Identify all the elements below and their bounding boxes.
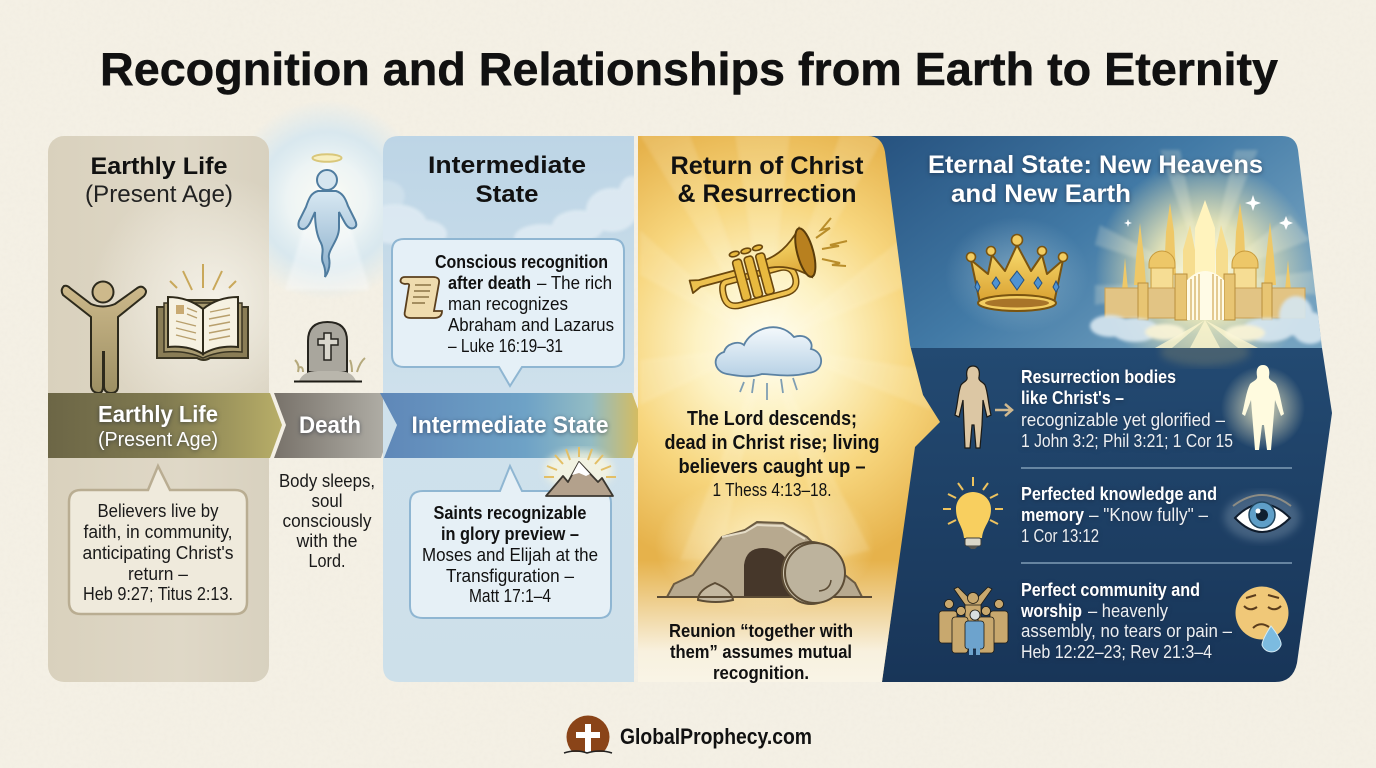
text: the lord descends — [664, 408, 880, 500]
heading: return of christ: Return of Christ — [670, 152, 864, 180]
text: the lord descends: believers caught up – — [678, 456, 866, 478]
timeline band: death — [274, 393, 392, 458]
heading: intermediate state — [428, 152, 586, 208]
text: perfect community: assembly, no tears or pain – — [1021, 621, 1232, 641]
band label: earthly life: (Present Age) — [98, 429, 218, 451]
clouds: city base — [1090, 296, 1328, 344]
callout: saints recognizable: Saints recognizable — [434, 503, 586, 523]
text: perfect community: – heavenly — [1088, 601, 1168, 621]
heading: eternal state — [928, 151, 1263, 208]
icon: light bulb — [943, 477, 1003, 549]
text: perfect community: worship — [1020, 601, 1082, 621]
text: perfected knowledge: memory — [1021, 505, 1084, 525]
callout: saints recognizable — [410, 466, 611, 618]
callout: conscious recognition: after death — [448, 273, 531, 293]
callout: saints recognizable: Matt 17:1–4 — [469, 586, 551, 606]
sparkles — [1124, 195, 1293, 230]
callout: conscious recognition: – The rich — [537, 273, 612, 293]
callout: believers: return – — [128, 564, 188, 584]
icon: mountain with sunburst — [544, 447, 616, 496]
text: the lord descends: 1 Thess 4:13–18. — [712, 480, 832, 500]
text: resurrection bodies: like Christ's – — [1021, 388, 1124, 408]
heading: intermediate state: Intermediate — [428, 152, 586, 179]
callout: believers: Heb 9:27; Titus 2:13. — [83, 584, 233, 604]
icon: tombstone — [294, 322, 365, 382]
text: perfected knowledge — [1021, 484, 1217, 546]
illustration: heavenly city — [1094, 148, 1316, 348]
callout: conscious recognition: man recognizes — [448, 294, 568, 314]
clouds — [383, 176, 634, 244]
icon: natural body to glorified body — [955, 365, 1305, 450]
heading: intermediate state: State — [476, 181, 538, 208]
callout: saints recognizable: in glory preview – — [441, 524, 579, 544]
text: resurrection bodies: Resurrection bodies — [1021, 367, 1176, 387]
heading: earthly life: (Present Age) — [85, 181, 233, 208]
text: death description: soul — [312, 491, 342, 511]
callout: conscious recognition: Abraham and Lazarus — [448, 315, 614, 335]
text: reunion: them” assumes mutual — [670, 642, 852, 662]
heading: earthly life — [85, 153, 233, 208]
panel: earthly life — [48, 136, 269, 682]
logo: GlobalProphecy.com — [620, 724, 812, 749]
text: the lord descends: dead in Christ rise; living — [664, 432, 880, 454]
text: perfected knowledge: Perfected knowledge and — [1021, 484, 1217, 504]
text: death description: with the — [296, 531, 358, 551]
heading: return of christ: & Resurrection — [678, 180, 856, 208]
icon: ascending soul with halo — [227, 100, 427, 310]
icon: sad face with tear — [1236, 586, 1288, 652]
text: death description: Body sleeps, — [279, 471, 375, 491]
timeline band: death: Death — [299, 412, 361, 439]
icon: scroll — [400, 277, 442, 318]
timeline band: intermediate state — [380, 393, 646, 458]
heading: eternal state: Eternal State: New Heavens — [928, 151, 1263, 179]
text: perfect community: Heb 12:22–23; Rev 21:3–4 — [1021, 642, 1212, 662]
text: death description: Lord. — [308, 551, 346, 571]
panel: return of christ — [638, 135, 940, 683]
timeline band: intermediate state: Intermediate State — [412, 412, 608, 439]
text: reunion: Reunion “together with — [669, 621, 853, 641]
callout: believers: faith, in community, — [84, 522, 232, 542]
text: death description: consciously — [282, 511, 372, 531]
text: reunion: recognition. — [713, 663, 809, 683]
text: resurrection bodies: 1 John 3:2; Phil 3:21; 1 Cor 15 — [1021, 431, 1233, 451]
heading: return of christ — [670, 152, 864, 208]
light rays — [640, 135, 930, 560]
row: perfected knowledge — [943, 477, 1300, 549]
text: perfected knowledge: 1 Cor 13:12 — [1021, 526, 1099, 546]
callout: conscious recognition: – Luke 16:19–31 — [448, 336, 563, 356]
heading: eternal state: and New Earth — [951, 180, 1131, 208]
callout: saints recognizable: Transfiguration – — [446, 566, 574, 586]
panel: eternal state — [860, 136, 1332, 682]
band label: earthly life — [98, 401, 218, 451]
heading: earthly life: Earthly Life — [90, 153, 228, 180]
logo — [564, 716, 811, 754]
callout: saints recognizable: Moses and Elijah at the — [422, 545, 598, 565]
icon: worshipping group — [939, 587, 1008, 655]
text: perfected knowledge: – "Know fully" – — [1089, 505, 1208, 525]
row: resurrection bodies — [955, 365, 1305, 451]
callout: conscious recognition — [392, 239, 624, 386]
callout: believers — [69, 466, 247, 614]
text: perfect community — [1020, 580, 1232, 662]
text: perfect community: Perfect community and — [1021, 580, 1200, 600]
icon: cross in sun — [564, 716, 612, 758]
icon: trumpet — [684, 218, 847, 316]
band label: earthly life: Earthly Life — [98, 401, 218, 427]
icon: eye — [1224, 493, 1300, 541]
icon: person with raised arms — [62, 282, 146, 393]
panel: intermediate state — [383, 136, 634, 682]
timeline band: earthly life — [48, 393, 282, 458]
row: perfect community — [939, 580, 1288, 662]
title: Recognition and Relationships from Earth to Eternity — [100, 43, 1278, 95]
text: death description — [279, 471, 375, 571]
text: reunion — [669, 621, 853, 683]
callout: believers: anticipating Christ's — [82, 543, 234, 563]
text: the lord descends: The Lord descends; — [687, 408, 857, 430]
icon: cloud — [716, 327, 821, 400]
callout: conscious recognition: Conscious recognition — [435, 252, 608, 272]
icon: open book — [157, 264, 248, 360]
icon: crown — [945, 217, 1089, 333]
text: resurrection bodies — [1021, 367, 1233, 451]
icon: empty tomb with rolled stone — [657, 522, 872, 604]
callout: believers: Believers live by — [98, 501, 218, 521]
text: resurrection bodies: recognizable yet glorified – — [1021, 410, 1225, 430]
